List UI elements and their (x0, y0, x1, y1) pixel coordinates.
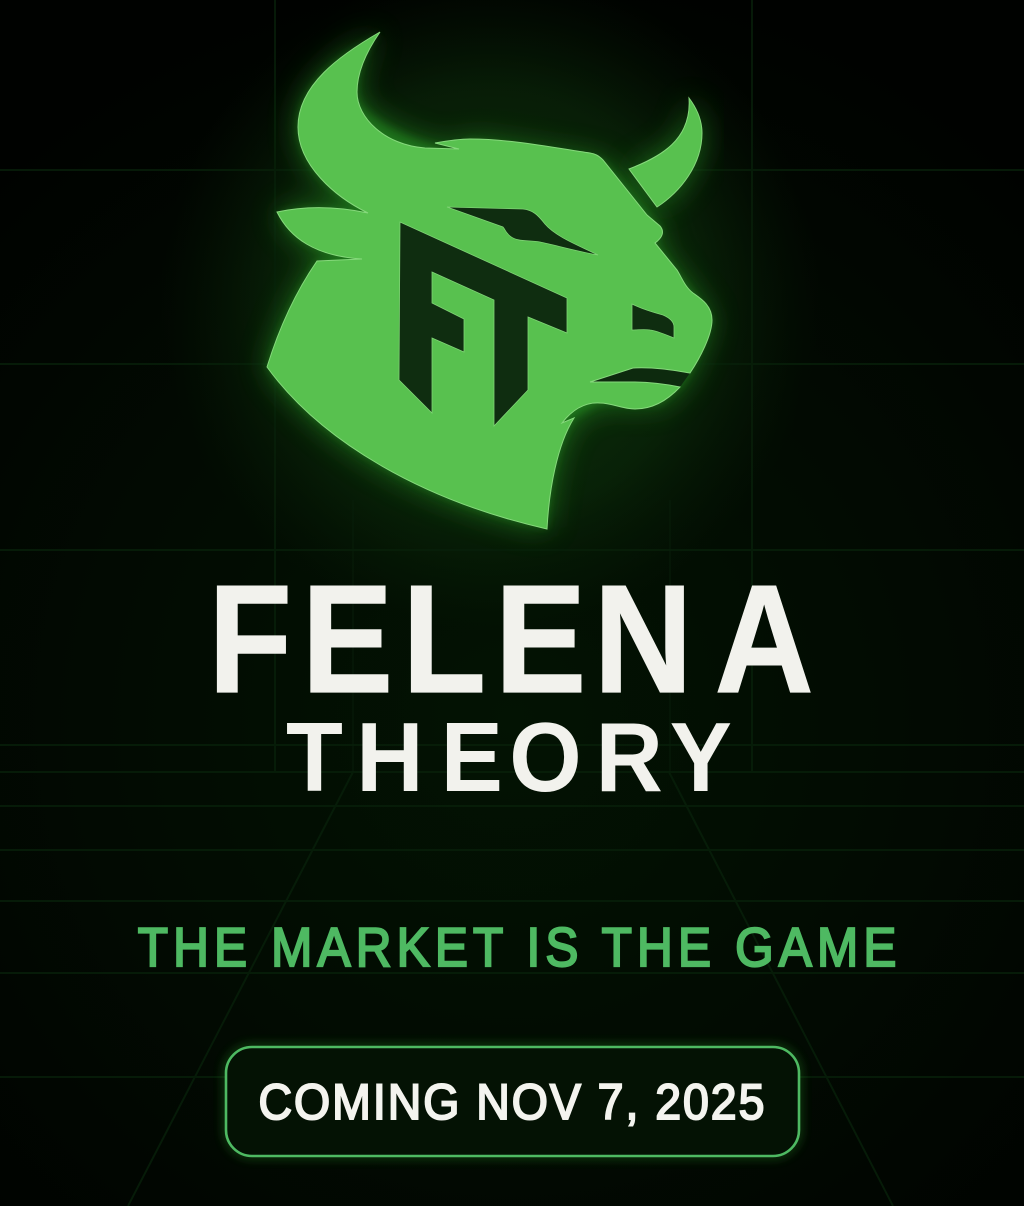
eye (447, 207, 598, 255)
date button (226, 1047, 799, 1156)
tagline: THE MARKET IS THE GAME (138, 918, 896, 979)
title: FELENA: FELENA (208, 553, 814, 725)
mouth shadow (590, 368, 690, 387)
button frame (226, 1047, 799, 1156)
right horn (629, 98, 702, 207)
subtitle: THEORY: THEORY (286, 703, 732, 813)
bull head silhouette (267, 32, 712, 529)
bull glow (267, 32, 712, 529)
nostril (632, 304, 674, 338)
button glow (226, 1047, 799, 1156)
FT monogram (399, 222, 567, 426)
logo: bull head with FT monogram (267, 32, 712, 529)
button label: COMING NOV 7, 2025 (259, 1074, 764, 1130)
